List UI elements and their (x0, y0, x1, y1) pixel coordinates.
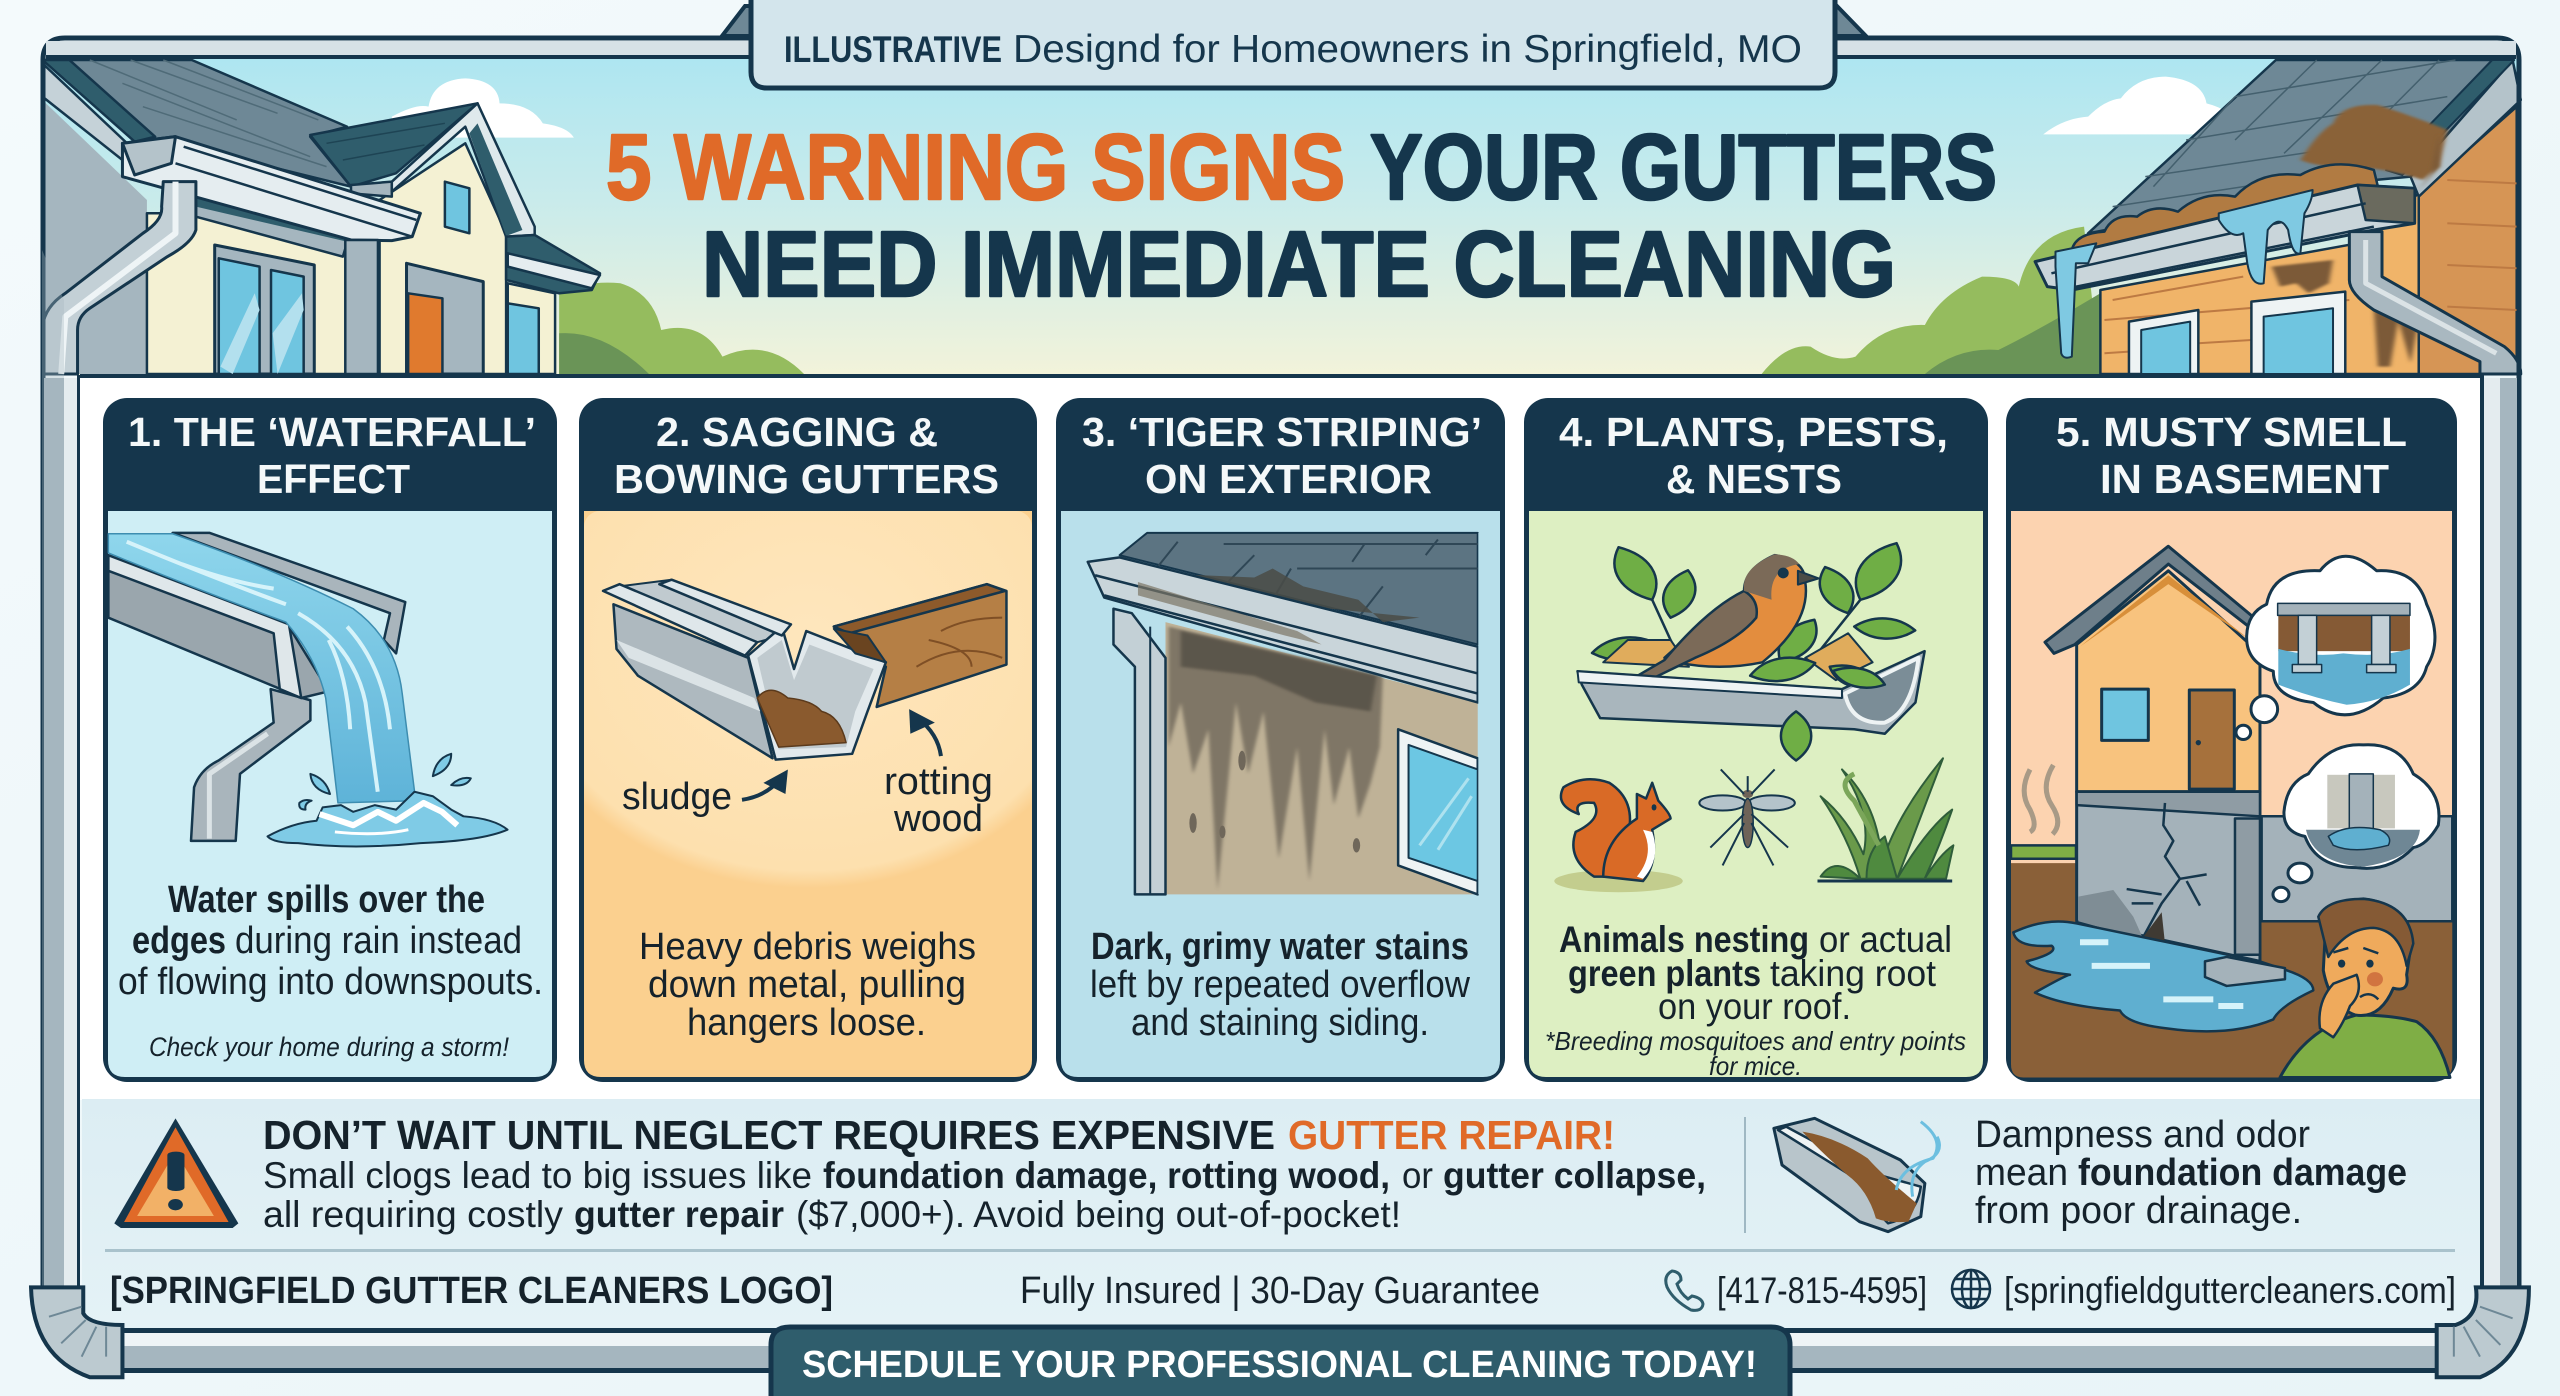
card heading: 3. ‘TIGER STRIPING’ (1082, 409, 1482, 455)
illustration: cracked foundation and flooding (2011, 546, 2452, 1077)
bottom gutter (122, 1328, 2440, 1373)
icon: phone (1666, 1271, 1703, 1310)
card text: or actual (1819, 919, 1952, 960)
labels: sludge (622, 776, 732, 818)
card heading (128, 409, 536, 502)
card note: for mice. (1709, 1051, 1802, 1081)
labels: wood (893, 798, 983, 840)
card note: Check your home during a storm! (149, 1032, 509, 1062)
side text (1975, 1114, 2407, 1232)
warning text: gutter collapse, (1443, 1155, 1706, 1196)
labels: rotting (884, 761, 993, 803)
warning text (263, 1155, 1706, 1235)
side text: foundation damage (2078, 1152, 2407, 1194)
card text: and staining siding. (1131, 1002, 1429, 1044)
card note: *Breeding mosquitoes and entry points (1545, 1026, 1966, 1056)
card heading: 1. THE ‘WATERFALL’ (128, 409, 536, 455)
card heading: 4. PLANTS, PESTS, (1559, 409, 1948, 455)
white content area (80, 378, 2480, 1100)
illustration: broken gutter and rotting wood (603, 580, 1006, 800)
horizontal divider (105, 1249, 2455, 1252)
card text: Dark, grimy water stains (1091, 926, 1469, 968)
right gutter elbow (2437, 1287, 2529, 1377)
card text: during rain instead (235, 920, 522, 962)
card text (1090, 926, 1471, 1044)
card text: edges (132, 920, 226, 962)
vertical divider (1744, 1117, 1746, 1233)
card text: of flowing into downspouts. (118, 961, 543, 1003)
panel: sign 5 musty smell (2006, 398, 2457, 1082)
warning text: gutter repair (574, 1194, 784, 1235)
warning text: all requiring costly (263, 1194, 563, 1235)
icon: warning triangle (114, 1118, 238, 1228)
side text: mean (1975, 1152, 2068, 1194)
warning heading: DON’T WAIT UNTIL NEGLECT REQUIRES EXPENSIVE (263, 1112, 1275, 1158)
top banner (722, 0, 1866, 88)
warning text: Small clogs lead to big issues like (263, 1155, 812, 1196)
call to action banner: SCHEDULE YOUR PROFESSIONAL CLEANING TODAY! (802, 1344, 1757, 1386)
card text: taking root (1770, 953, 1937, 994)
banner text: Designd for Homeowners in Springfield, MO (1013, 28, 1802, 71)
card heading: BOWING GUTTERS (614, 456, 999, 502)
card text: Animals nesting (1559, 919, 1809, 960)
panel: sign 3 tiger striping (1056, 398, 1505, 1082)
illustration: clogged house at right (1762, 60, 2521, 374)
icon: weeds (1817, 758, 1953, 881)
bottom info panel (82, 1099, 2480, 1331)
warning text: ($7,000+). Avoid being out-of-pocket! (796, 1194, 1401, 1235)
card text: on your roof. (1658, 986, 1851, 1027)
card note (1545, 1026, 1966, 1081)
icon: globe (1952, 1270, 1990, 1308)
card heading: EFFECT (257, 456, 410, 502)
illustration: bird and leaves in gutter (1578, 537, 1925, 761)
card text: green plants (1568, 953, 1761, 994)
card text (118, 879, 543, 1003)
warning text: foundation damage, rotting wood, (823, 1155, 1390, 1196)
panel: sign 1 waterfall (103, 398, 557, 1082)
card text (1559, 919, 1952, 1027)
title: NEED IMMEDIATE CLEANING (702, 212, 1896, 316)
header sky background (44, 59, 2518, 375)
card heading (2056, 409, 2407, 502)
card text: left by repeated overflow (1090, 964, 1471, 1006)
banner text: ILLUSTRATIVE (784, 29, 1002, 70)
card text: hangers loose. (687, 1002, 926, 1044)
side text: Dampness and odor (1975, 1114, 2310, 1156)
card heading: & NESTS (1666, 456, 1842, 502)
card text: Water spills over the (168, 879, 485, 921)
footer website text: [springfieldguttercleaners.com] (2004, 1270, 2456, 1311)
card heading: 5. MUSTY SMELL (2056, 409, 2407, 455)
illustration: overflowing gutter (108, 533, 508, 846)
footer phone text: [417-815-4595] (1717, 1270, 1927, 1311)
card text: Heavy debris weighs (639, 926, 976, 968)
card heading (1559, 409, 1948, 502)
call to action banner (771, 1327, 1790, 1396)
card text: down metal, pulling (648, 964, 966, 1006)
labels (622, 761, 993, 840)
card text (639, 926, 976, 1044)
card heading: IN BASEMENT (2100, 456, 2389, 502)
warning heading: GUTTER REPAIR! (1288, 1112, 1615, 1158)
panel: sign 4 plants pests nests (1524, 398, 1988, 1082)
footer guarantee text: Fully Insured | 30-Day Guarantee (1020, 1270, 1540, 1312)
footer logo text: [SPRINGFIELD GUTTER CLEANERS LOGO] (110, 1270, 833, 1312)
card heading: ON EXTERIOR (1145, 456, 1432, 502)
icon: squirrel (1554, 779, 1683, 892)
side text: from poor drainage. (1975, 1190, 2302, 1232)
card heading: 2. SAGGING & (656, 409, 938, 455)
title (606, 115, 1997, 316)
icon: mosquito (1699, 769, 1795, 865)
warning text: or (1402, 1155, 1433, 1196)
illustration: clean house at left (42, 60, 804, 374)
icon: clogged gutter (1774, 1118, 1939, 1232)
title: YOUR GUTTERS (1370, 115, 1997, 219)
illustration: stained siding (1088, 533, 1483, 894)
card heading (1082, 409, 1482, 502)
title: 5 WARNING SIGNS (606, 115, 1345, 219)
left gutter elbow (31, 1287, 122, 1377)
panel: sign 2 sagging (579, 398, 1037, 1082)
card heading (614, 409, 999, 502)
